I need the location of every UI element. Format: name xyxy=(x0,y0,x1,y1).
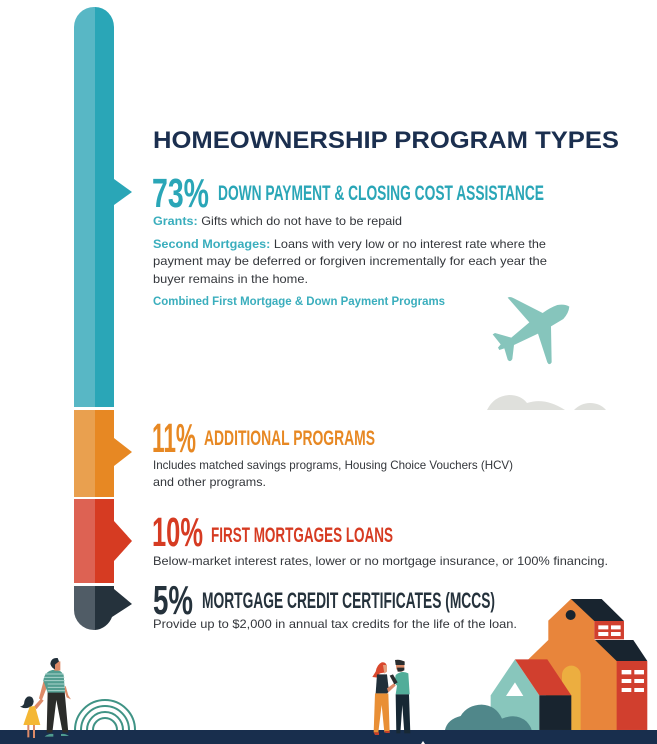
text: second mortgages: Second Mortgages: Loans with very low or no interest rate where the xyxy=(153,238,546,251)
small teal house xyxy=(491,659,539,730)
stat: 10%: 10% xyxy=(152,509,203,555)
yellow door xyxy=(562,666,581,730)
bush xyxy=(445,705,532,730)
heading: first mortgages: FIRST MORTGAGES LOANS xyxy=(211,524,393,547)
stat: 11%: 11% xyxy=(152,415,196,461)
section: 5% MCCs xyxy=(153,577,517,631)
small house dark front xyxy=(539,695,571,730)
lower roof xyxy=(595,640,647,661)
text: second mortgages: buyer remains in the home. xyxy=(153,273,308,286)
clouds xyxy=(487,395,606,410)
text: description xyxy=(153,459,513,489)
text: combined programs: Combined First Mortgage & Down Payment Programs xyxy=(153,295,445,308)
text: grants: Grants: Gifts which do not have to be repaid xyxy=(153,215,402,228)
text: description: Includes matched savings programs, Housing Choice Vouchers (HCV) xyxy=(153,459,513,472)
text: second mortgages xyxy=(153,238,547,286)
attic round window xyxy=(566,610,576,620)
title: HOMEOWNERSHIP PROGRAM TYPES xyxy=(153,127,619,154)
segment: navy 5% xyxy=(74,586,132,630)
small house roof xyxy=(515,659,571,695)
child xyxy=(20,696,44,738)
ground marker xyxy=(421,741,425,744)
woman xyxy=(372,662,396,735)
stat: 5%: 5% xyxy=(153,577,193,623)
icon: airplane xyxy=(493,297,569,364)
text: second mortgages: payment may be deferred or forgiven incrementally for each year the xyxy=(153,255,547,268)
illustration: couple xyxy=(372,660,410,735)
illustration: houses xyxy=(445,599,647,730)
section: 73% down payment xyxy=(152,170,547,308)
text: description: Below-market interest rates, lower or no mortgage insurance, or 100% financing. xyxy=(153,555,608,568)
text: description: Provide up to $2,000 in annual tax credits for the life of the loan. xyxy=(153,618,517,631)
thermometer bar xyxy=(74,7,132,630)
man xyxy=(390,660,410,733)
red tower xyxy=(617,661,647,730)
illustration: father and child xyxy=(20,658,71,738)
heading: additional programs: ADDITIONAL PROGRAMS xyxy=(204,427,375,450)
text: description: and other programs. xyxy=(153,476,266,489)
segment: red 10% xyxy=(74,499,132,583)
heading: mortgage credit certificates: MORTGAGE CREDIT CERTIFICATES (MCCS) xyxy=(202,588,495,613)
father xyxy=(39,658,71,737)
section: 10% first mortgages xyxy=(152,509,608,568)
icon: rainbow arcs xyxy=(75,700,135,730)
segment: teal 73% xyxy=(74,7,132,407)
upper roof xyxy=(571,599,624,621)
red window box xyxy=(594,621,624,639)
section: 11% additional programs xyxy=(152,415,513,489)
ground band xyxy=(0,730,657,744)
large orange house xyxy=(528,599,618,730)
stat: 73%: 73% xyxy=(152,170,209,216)
segment: orange 11% xyxy=(74,410,132,497)
